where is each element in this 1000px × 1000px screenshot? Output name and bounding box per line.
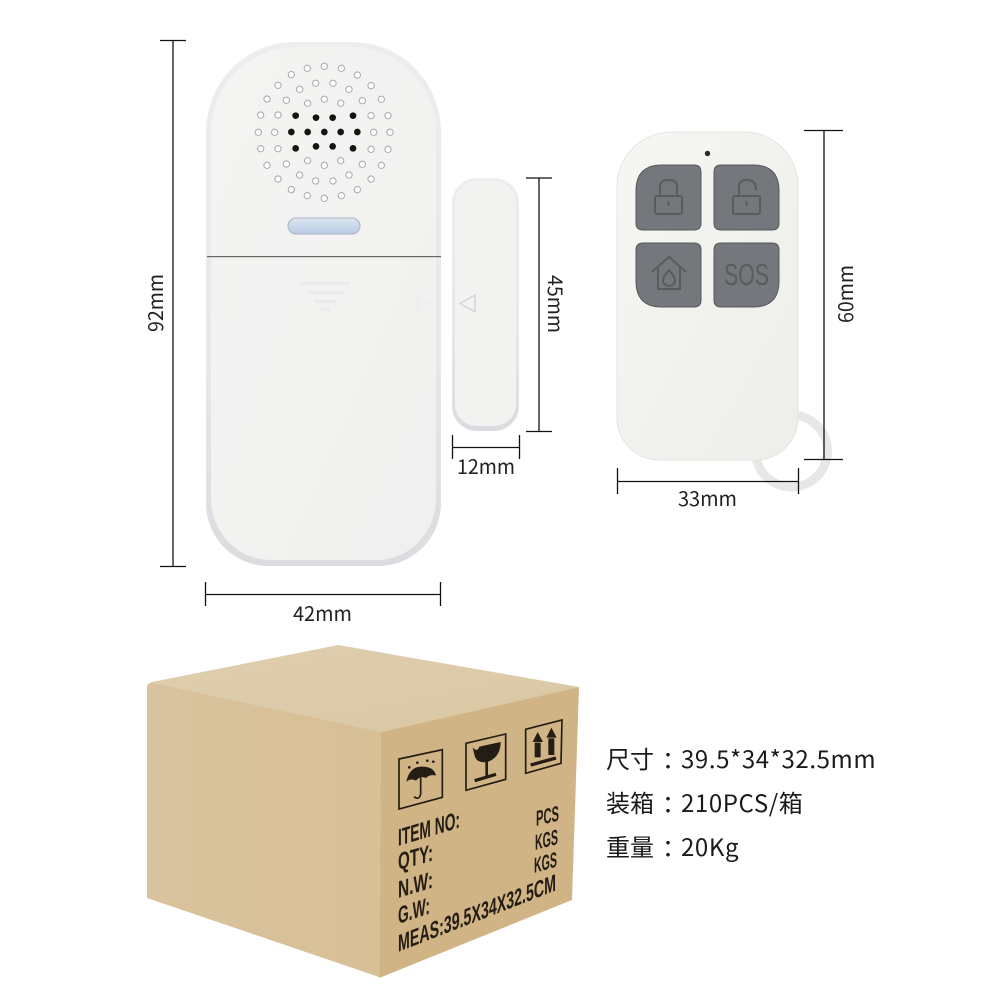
- carton marking text: ITEM NO:: [398, 806, 460, 851]
- carton marking text: N.W:: [398, 866, 433, 903]
- dimension: 12mm sensor width: [452, 435, 520, 480]
- dimension: 92mm height: [140, 40, 186, 566]
- carton marking text: KGS: [535, 826, 558, 855]
- carton marking text: PCS: [536, 802, 559, 831]
- dimension: 60mm remote height: 60mm: [830, 265, 859, 323]
- sensor triangle mark: [460, 295, 475, 312]
- remote control: [617, 132, 798, 460]
- carton specifications: 重量 ：20Kg: [606, 828, 739, 863]
- handling icon: this way up: [526, 720, 562, 773]
- dimension: 42mm width: 42mm: [293, 598, 352, 627]
- carton specifications: 装箱 ：210PCS/箱: [606, 784, 803, 819]
- dimension: 60mm remote height: [804, 130, 859, 460]
- dimension: 45mm sensor height: 45mm: [542, 275, 571, 333]
- handling icon: umbrella: [399, 750, 442, 809]
- remote key ring: [756, 415, 828, 487]
- remote LED: [705, 151, 710, 156]
- battery cover arrow: [301, 282, 350, 311]
- SOS button: [714, 243, 779, 307]
- carton marking text: KGS: [534, 848, 557, 878]
- carton marking text: MEAS:39.5X34X32.5CM: [398, 868, 556, 957]
- door sensor magnet: [452, 178, 519, 431]
- carton marking text: [398, 802, 559, 957]
- SOS button: SOS: [724, 257, 769, 292]
- housing seam: [207, 256, 441, 257]
- door alarm main unit: [206, 42, 441, 566]
- dimension: 33mm remote width: [618, 468, 798, 512]
- carton marking text: QTY:: [398, 839, 433, 875]
- dimension: 12mm sensor width: 12mm: [457, 451, 515, 480]
- side alignment triangle: [417, 296, 429, 311]
- indicator light: [288, 218, 360, 234]
- home button: [636, 243, 701, 307]
- lock button: [636, 165, 701, 230]
- carton specifications: [606, 740, 876, 863]
- carton left face: [147, 683, 381, 977]
- unlock button: [714, 165, 779, 230]
- dimension: 33mm remote width: 33mm: [678, 483, 737, 512]
- dimension: 42mm width: [206, 582, 440, 627]
- carton specifications: 尺寸 ：39.5*34*32.5mm: [606, 740, 876, 775]
- carton right face: [379, 687, 579, 978]
- carton top face: [148, 645, 579, 732]
- dimension: 92mm height: 92mm: [140, 274, 169, 332]
- shipping carton: [147, 645, 579, 978]
- speaker holes: [255, 63, 393, 201]
- carton marking text: G.W:: [398, 892, 430, 929]
- handling icon: fragile glass: [466, 734, 506, 790]
- dimension: 45mm sensor height: [526, 178, 571, 432]
